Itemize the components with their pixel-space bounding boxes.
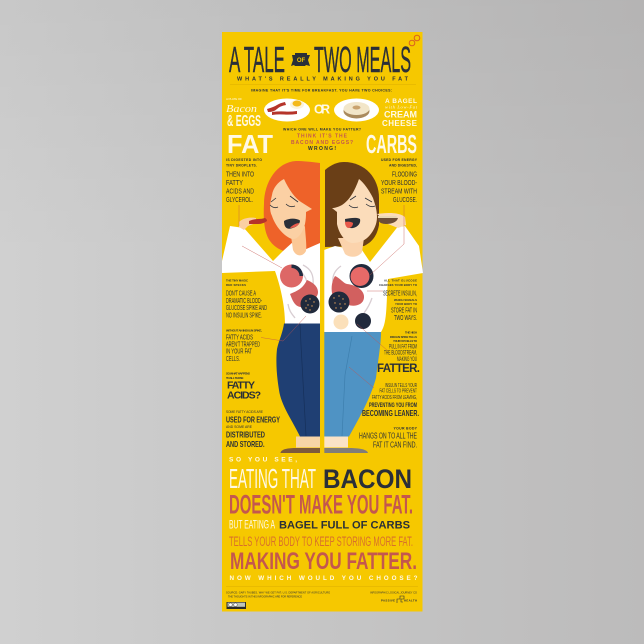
badge: of: OF bbox=[297, 58, 305, 64]
callout: think it's bacon: WRONG! bbox=[308, 146, 336, 152]
mouth bbox=[284, 219, 300, 229]
choice label: bagel: CREAM bbox=[384, 110, 417, 120]
text: pull in fat: MAKING YOU bbox=[397, 357, 417, 363]
plate: bagel bbox=[334, 98, 379, 122]
conclusion: BAGEL FULL OF CARBS bbox=[279, 520, 410, 532]
text: fat digestion: IS DIGESTED INTO bbox=[226, 158, 262, 162]
text: used and stored: AND STORED. bbox=[226, 439, 264, 449]
plate: bacon and eggs bbox=[264, 98, 310, 122]
text: what happens: TO ALL THOSE bbox=[226, 376, 244, 380]
icon: infinity link bbox=[409, 35, 420, 46]
footer: credit bbox=[370, 592, 417, 603]
figure: carb woman bbox=[324, 162, 423, 453]
droplet circle bbox=[280, 264, 303, 288]
heading: fat: FAT bbox=[227, 129, 273, 159]
text: carbs digestion: STREAM WITH bbox=[381, 186, 417, 196]
subtitle: WHAT'S REALLY MAKING YOU FAT bbox=[237, 76, 409, 82]
eyes bbox=[270, 196, 298, 208]
text: pull in fat: THE HIGH bbox=[405, 330, 417, 334]
question: WHICH ONE WILL MAKE YOU FATTER? bbox=[283, 128, 361, 132]
text: fatty acids not trapped: IN YOUR FAT bbox=[226, 346, 252, 356]
callout: think it's bacon: BACON AND EGGS? bbox=[291, 140, 353, 146]
shoe bbox=[280, 448, 320, 453]
pale fat circle bbox=[334, 314, 348, 330]
jeans bbox=[276, 324, 320, 436]
figure: fat woman bbox=[222, 161, 320, 453]
footer: credit: PASSIVE bbox=[381, 598, 395, 602]
text: prevent leaving: INSULIN TELLS YOUR bbox=[385, 383, 417, 389]
text: fatty acids not trapped: AREN'T TRAPPED bbox=[226, 340, 260, 348]
text: pull in fat: INSULIN SPIKE TELLS bbox=[390, 335, 417, 339]
conclusion: BUT EATING A bbox=[229, 520, 275, 532]
text: fatty acids not trapped: CELLS. bbox=[226, 354, 240, 363]
choice label: bacon and eggs: A PLATE OF bbox=[226, 97, 242, 101]
footer: credit: INFOGRAPHIC LOGICAL JOURNEY CO bbox=[370, 592, 417, 594]
conclusion: TELLS YOUR BODY TO KEEP STORING MORE FAT. bbox=[229, 534, 413, 549]
text: carbs digestion bbox=[381, 158, 418, 204]
choice label: bacon and eggs: & EGGS bbox=[227, 113, 261, 130]
text: hangs on bbox=[359, 426, 418, 450]
jeans bbox=[324, 332, 381, 436]
text: hangs on: HANGS ON TO ALL THE bbox=[359, 432, 417, 440]
callout: think it's bacon: THINK IT'S THE bbox=[297, 134, 348, 140]
icon: logo mark bbox=[397, 596, 404, 603]
text: prevent leaving: PREVENTING YOU FROM bbox=[369, 402, 417, 409]
text: used and stored: USED FOR ENERGY bbox=[226, 414, 280, 424]
text: hangs on: YOUR BODY bbox=[394, 426, 418, 430]
text: fat digestion: GLYCEROL. bbox=[226, 195, 253, 204]
footer: sources bbox=[226, 592, 330, 598]
text: no insulin spike: RED SPECKS bbox=[226, 283, 246, 287]
heading: carbs: CARBS bbox=[366, 129, 417, 159]
shoe bbox=[324, 448, 368, 453]
text: what happens: ACIDS? bbox=[227, 390, 261, 402]
organ lines bbox=[288, 265, 313, 318]
conclusion: NOW WHICH WOULD YOU CHOOSE? bbox=[230, 575, 418, 582]
text: prevent leaving bbox=[362, 383, 419, 418]
choice label: bagel: with Low-Fat bbox=[385, 104, 418, 110]
neck bbox=[291, 226, 306, 255]
hair bbox=[325, 162, 379, 247]
choice label: bagel bbox=[382, 98, 418, 128]
footer: license badge bbox=[226, 602, 246, 609]
OR: OR bbox=[314, 102, 330, 116]
conclusion: DOESN'T MAKE YOU FAT. bbox=[229, 490, 413, 520]
badge: of bbox=[291, 53, 310, 66]
hand bbox=[239, 218, 256, 230]
text: fat digestion: FATTY bbox=[226, 178, 243, 187]
text: pull in fat: PULL IN FAT FROM bbox=[389, 344, 417, 350]
hair bbox=[264, 161, 320, 252]
footer: sources: SOURCE: GARY TAUBES, WHY WE GET FAT; U.S. DEPARTMENT OF AGRICULTURE bbox=[226, 592, 330, 594]
text: no insulin spike: NO INSULIN SPIKE. bbox=[226, 312, 262, 320]
conclusion: SO YOU SEE, bbox=[229, 456, 297, 464]
text: no insulin spike: GLUCOSE SPIKE AND bbox=[226, 305, 267, 312]
text: carbs digestion: AND DIGESTED, bbox=[389, 164, 417, 168]
mouth bbox=[345, 218, 360, 228]
text: carbs digestion: USED FOR ENERGY bbox=[381, 158, 418, 162]
bacon strip bbox=[249, 218, 267, 224]
bagel piece bbox=[378, 218, 398, 224]
text: fatty acids not trapped: WITHOUT AN INSULIN SPIKE, bbox=[226, 328, 262, 332]
pointer lines bbox=[239, 205, 306, 341]
text: secrete insulin: WHICH SIGNALS bbox=[394, 298, 417, 302]
text: secrete insulin: SECRETE INSULIN, bbox=[383, 290, 417, 298]
text: fatty acids not trapped bbox=[226, 328, 262, 363]
neck and chest bbox=[338, 238, 364, 257]
text: what happens: SO WHAT HAPPENS bbox=[226, 372, 250, 376]
text: no insulin spike: THE TINY MAGIC bbox=[226, 278, 248, 282]
text: no insulin spike bbox=[226, 278, 267, 320]
conclusion bbox=[226, 456, 418, 586]
text: carbs digestion: YOUR BLOOD- bbox=[381, 178, 417, 187]
choice label: bacon and eggs: Bacon bbox=[226, 103, 258, 115]
text: pull in fat bbox=[377, 330, 420, 375]
choice label: bacon and eggs bbox=[226, 97, 261, 130]
text: fat digestion: THEN INTO bbox=[226, 170, 254, 178]
glucose circle bbox=[350, 264, 374, 288]
text: no insulin spike: DRAMATIC BLOOD- bbox=[226, 298, 262, 305]
eyes bbox=[349, 196, 375, 208]
conclusion: EATING THAT bbox=[229, 463, 316, 494]
feet bbox=[324, 436, 348, 448]
footer: credit: HEALTH bbox=[404, 598, 417, 602]
conclusion: MAKING YOU FATTER. bbox=[230, 548, 417, 575]
divider bbox=[320, 161, 324, 455]
intro line: IMAGINE THAT IT'S TIME FOR BREAKFAST. YOU HAVE TWO CHOICES: bbox=[251, 88, 392, 92]
dark fat circle bbox=[355, 313, 371, 329]
text: pull in fat: YOUR FAT CELLS TO bbox=[393, 339, 418, 343]
text: hangs on: FAT IT CAN FIND. bbox=[373, 440, 417, 450]
text: secrete insulin bbox=[379, 278, 418, 322]
choice label: bagel: CHEESE bbox=[382, 119, 418, 128]
stomach bbox=[290, 280, 318, 307]
title: A TALE bbox=[229, 39, 285, 80]
feet bbox=[296, 436, 320, 448]
face bbox=[270, 179, 312, 239]
text: secrete insulin: STORE FAT IN bbox=[391, 308, 417, 314]
text: secrete insulin: CHARGES YOUR BODY TO bbox=[379, 283, 418, 287]
organ lines bbox=[333, 266, 372, 313]
text: fat digestion: ACIDS AND bbox=[226, 186, 254, 196]
text: secrete insulin: ALL THAT GLUCOSE bbox=[384, 278, 417, 282]
pointer lines bbox=[349, 205, 404, 388]
face bbox=[332, 179, 377, 243]
torso and arm bbox=[222, 226, 320, 324]
poster panel bbox=[222, 32, 422, 612]
text: prevent leaving: FATTY ACIDS FROM LEAVING, bbox=[372, 395, 417, 401]
text: used and stored: DISTRIBUTED bbox=[226, 430, 265, 440]
text: secrete insulin: TWO WAYS. bbox=[394, 315, 417, 322]
text: secrete insulin: YOUR BODY TO bbox=[395, 302, 418, 306]
fat cell circle bbox=[300, 294, 320, 314]
text: no insulin spike: DON'T CAUSE A bbox=[226, 290, 256, 298]
hand bbox=[377, 213, 406, 228]
text: what happens: FATTY bbox=[227, 380, 255, 392]
text: used and stored: SOME FATTY ACIDS ARE bbox=[226, 409, 263, 414]
conclusion: BACON bbox=[323, 464, 412, 494]
text: pull in fat: FATTER. bbox=[377, 363, 420, 375]
text: used and stored: AND SOME ARE bbox=[226, 424, 252, 429]
text: fat digestion: TINY DROPLETS. bbox=[226, 164, 257, 168]
footer: sources: THE THOUGHTS IN THIS INFOGRAPHIC ARE FOR REFERENCE bbox=[228, 596, 302, 598]
text: carbs digestion: FLOODING bbox=[392, 170, 417, 178]
title bbox=[229, 39, 411, 80]
text: fat digestion bbox=[226, 158, 262, 204]
text: carbs digestion: GLUCOSE. bbox=[393, 195, 417, 204]
text: what happens bbox=[226, 372, 261, 402]
text: prevent leaving: BECOMING LEANER. bbox=[362, 408, 419, 418]
torso and arm bbox=[324, 226, 423, 333]
callout: think it's bacon bbox=[291, 134, 353, 152]
text: pull in fat: THE BLOODSTREAM, bbox=[384, 350, 417, 356]
text: prevent leaving: FAT CELLS TO PREVENT bbox=[380, 388, 417, 394]
text: used and stored bbox=[226, 409, 280, 449]
fat cell circle bbox=[328, 292, 350, 312]
text: TWO MEALS bbox=[314, 39, 411, 80]
choice label: bagel: A BAGEL bbox=[385, 98, 417, 105]
stomach bbox=[332, 276, 364, 306]
text: fatty acids not trapped: FATTY ACIDS bbox=[226, 332, 253, 342]
